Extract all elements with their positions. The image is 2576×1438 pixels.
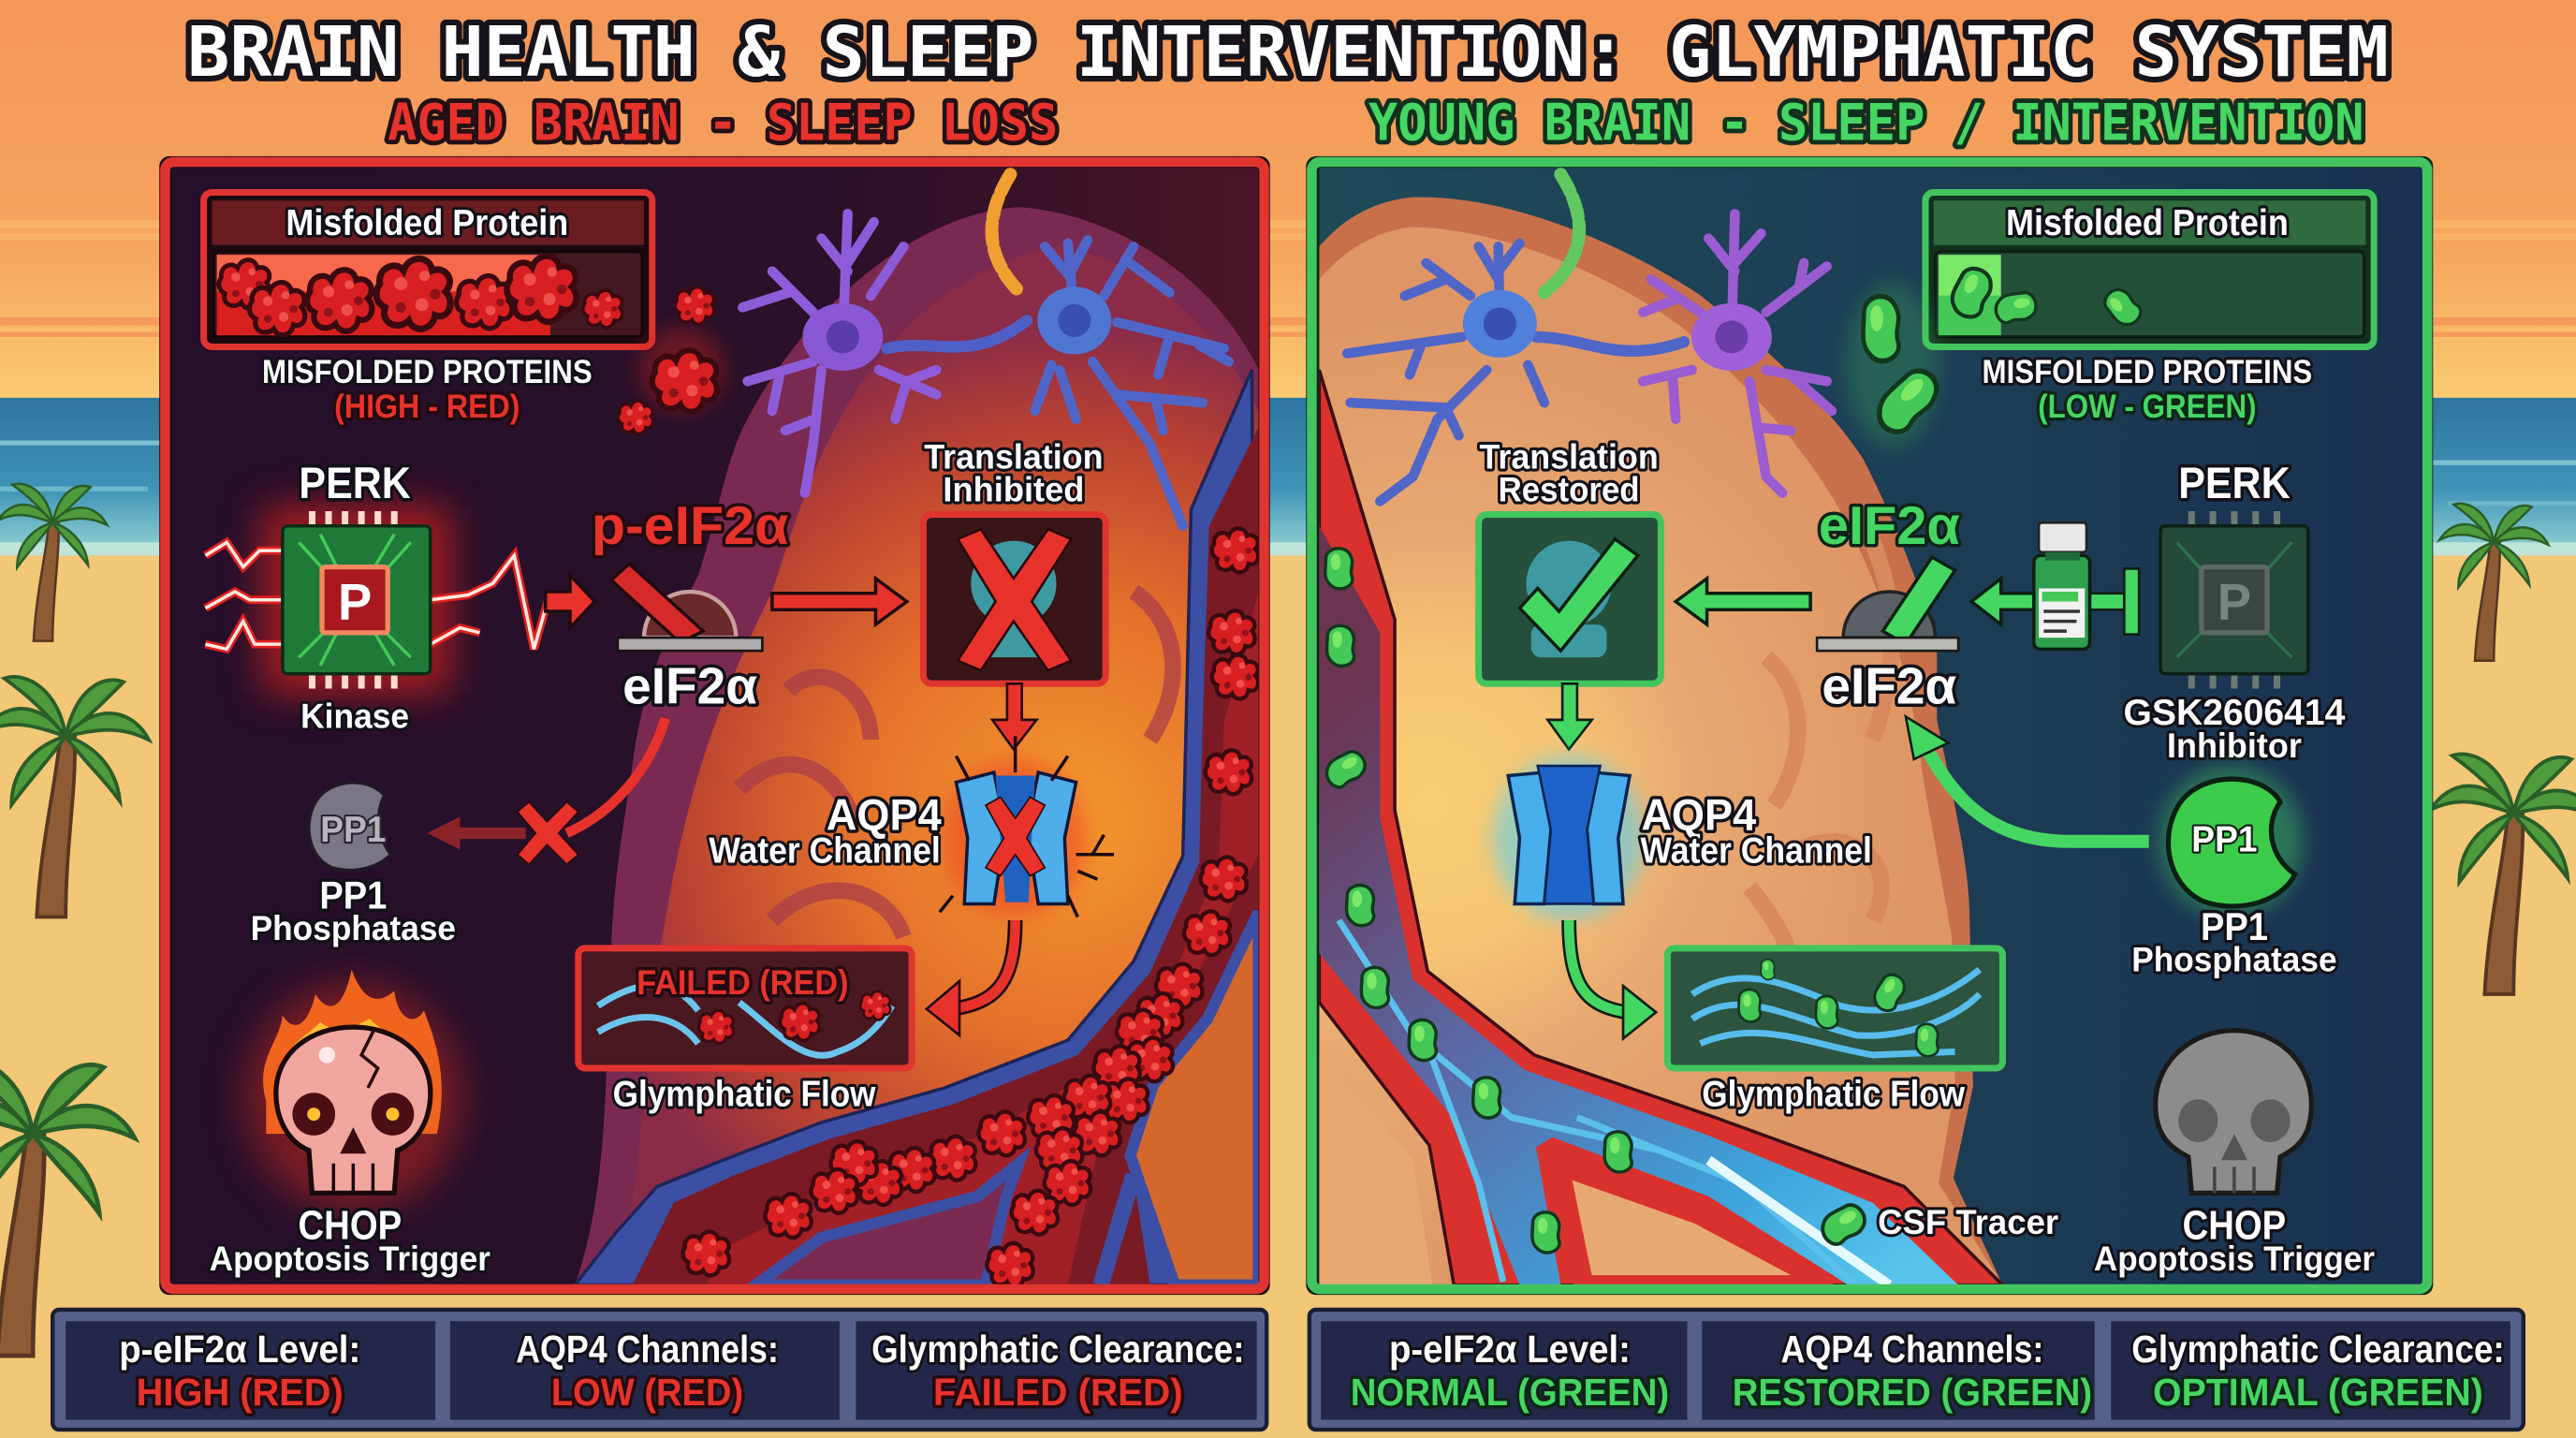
arrow: PERK to lever [546,575,594,628]
label: PERK young: PERK [2178,459,2291,508]
label: glymphatic flow aged: Glymphatic Flow [613,1074,876,1114]
stat: clearance optimal: OPTIMAL (GREEN) [2153,1371,2483,1414]
box: translation inhibited [923,514,1105,683]
stat: AQP4 low: LOW (RED) [551,1371,743,1414]
stat: p-eIF2a normal: p-eIF2α Level: [1389,1328,1631,1371]
label: translation restored [1479,437,1659,508]
neurons, aged side [742,174,1229,526]
icon: PP1 inactive [309,783,391,871]
label: p-eIF2a: p-eIF2α [592,496,788,556]
label: translation restored: Translation [1479,437,1659,476]
stat: clearance failed [871,1328,1244,1414]
box: glymphatic flow failed [578,948,912,1068]
label: translation restored: Restored [1499,470,1640,508]
label: PP1 aged: Phosphatase [251,909,456,947]
vessel with protein clumps [575,370,1258,1287]
label: eIF2a young: eIF2α [1822,657,1956,714]
panel: young brain [1306,156,2433,1295]
label: misfolded proteins low: (LOW - GREEN) [2038,389,2257,425]
stat: p-eIF2a high: HIGH (RED) [137,1371,344,1414]
stat: AQP4 restored: RESTORED (GREEN) [1733,1371,2092,1414]
label: AQP4 aged: Water Channel [709,831,941,872]
stat: AQP4 low [516,1328,779,1414]
label: CSF tracer: CSF Tracer [1878,1203,2058,1241]
switch: eIF2a lever restored [1817,557,1958,651]
label: GSK2606414 inhibitor: GSK2606414 [2123,693,2346,733]
stat: AQP4 restored [1733,1328,2092,1414]
brain tissue, aged [575,207,1258,1285]
label: PP1 young: Phosphatase [2131,940,2337,978]
stat: p-eIF2a normal [1351,1328,1669,1414]
meter: misfolded protein high: Misfolded Protein [285,203,568,243]
icon: PP1 inactive: PP1 [320,810,386,850]
icon: flaming skull [245,970,461,1212]
title: BRAIN HEALTH & SLEEP INTERVENTION: GLYMPHATIC SYSTEM [187,13,2389,93]
icon: drug vial with inhibition bar [2034,522,2139,649]
label: AQP4 aged [709,790,942,872]
stat: p-eIF2a normal: NORMAL (GREEN) [1351,1371,1669,1414]
vessel with CSF tracer [1319,370,2002,1285]
label: translation inhibited [924,437,1104,508]
label: misfolded proteins low [1983,354,2312,425]
free misfolded protein blobs, green [1847,283,1945,448]
stat: clearance optimal: Glymphatic Clearance: [2131,1328,2505,1371]
PERK kinase chip, active [205,506,550,694]
arrow: translation to AQP4 [992,683,1036,749]
label: GSK2606414 inhibitor [2123,693,2346,765]
stat: clearance failed: FAILED (RED) [933,1371,1183,1414]
label: misfolded proteins high: MISFOLDED PROTEINS [262,354,593,390]
icon: AQP4 channel broken [940,736,1114,917]
label: GSK2606414 inhibitor: Inhibitor [2167,726,2302,765]
label: CHOP young [2094,1202,2375,1278]
label: CHOP aged [210,1202,490,1278]
icon: PP1 active: PP1 [2191,819,2258,859]
label: CHOP aged: Apoptosis Trigger [210,1240,490,1278]
label: eIF2a active: eIF2α [1819,496,1960,556]
label: AQP4 young: Water Channel [1640,831,1872,872]
label: AQP4 aged: AQP4 [827,790,942,840]
brain tissue, young [1319,198,2002,1285]
label: translation inhibited: Translation [924,437,1104,476]
status bar: aged [52,1310,1266,1430]
arrow: AQP4 to flow optimal [1569,920,1656,1038]
label: misfolded proteins low: MISFOLDED PROTEINS [1983,354,2312,390]
label: CHOP young: CHOP [2183,1202,2286,1248]
stat: clearance failed: Glymphatic Clearance: [871,1328,1244,1371]
label: PP1 aged: PP1 [319,873,387,917]
label: CHOP young: Apoptosis Trigger [2094,1240,2375,1278]
label: glymphatic flow young: Glymphatic Flow [1702,1074,1966,1114]
stat: AQP4 low: AQP4 Channels: [516,1328,779,1371]
neurons, young side [1347,174,1832,501]
box: translation restored [1479,514,1661,683]
label: AQP4 young: AQP4 [1641,790,1757,840]
stat: AQP4 restored: AQP4 Channels: [1781,1328,2043,1371]
label: misfolded proteins high [262,354,593,425]
stat: p-eIF2a high [119,1328,360,1414]
label: AQP4 young [1640,790,1872,872]
switch: p-eIF2a lever on [611,564,762,651]
icon: AQP4 channel healthy [1493,756,1645,920]
heading: aged brain: AGED BRAIN - SLEEP LOSS [388,93,1058,152]
label: PP1 aged [251,873,456,947]
free misfolded protein clumps, red [618,286,724,433]
PERK kinase chip, active: P [338,574,372,631]
icon: gray skull [2156,1031,2311,1193]
stat: clearance optimal [2131,1328,2505,1414]
status bar: young [1310,1310,2524,1430]
arrow: AQP4 to flow failed [927,920,1016,1035]
arrow: vial to lever [1971,579,2034,624]
box: glymphatic flow failed: FAILED (RED) [637,963,849,1002]
stat: p-eIF2a high: p-eIF2α Level: [119,1328,360,1371]
label: translation inhibited: Inhibited [943,470,1084,508]
label: PERK: PERK [299,459,411,508]
arrow: blocked to PP1 [427,718,666,864]
meter: misfolded protein high [204,192,652,346]
heading: young brain: YOUNG BRAIN - SLEEP / INTERVENTION [1368,93,2364,152]
label: CHOP aged: CHOP [299,1202,402,1248]
label: PP1 young [2131,904,2337,978]
icon: PP1 active [2159,766,2304,917]
arrow: lever to translation [772,579,907,624]
label: eIF2a aged: eIF2α [622,657,757,714]
box: glymphatic flow optimal [1667,948,2002,1068]
meter: misfolded protein low: Misfolded Protein [2006,203,2289,243]
arrow: PP1 to eIF2a [1906,716,2149,842]
label: PP1 young: PP1 [2201,904,2268,948]
PERK chip, inhibited [2160,511,2308,689]
arrow: translation to AQP4 young [1547,683,1592,749]
label: kinase: Kinase [300,697,409,736]
panel: aged brain [159,156,1270,1295]
meter: misfolded protein low [1925,192,2374,346]
label: misfolded proteins high: (HIGH - RED) [334,389,520,425]
PERK chip, inhibited: P [2217,574,2251,631]
arrow: lever to translation restored [1676,579,1810,624]
